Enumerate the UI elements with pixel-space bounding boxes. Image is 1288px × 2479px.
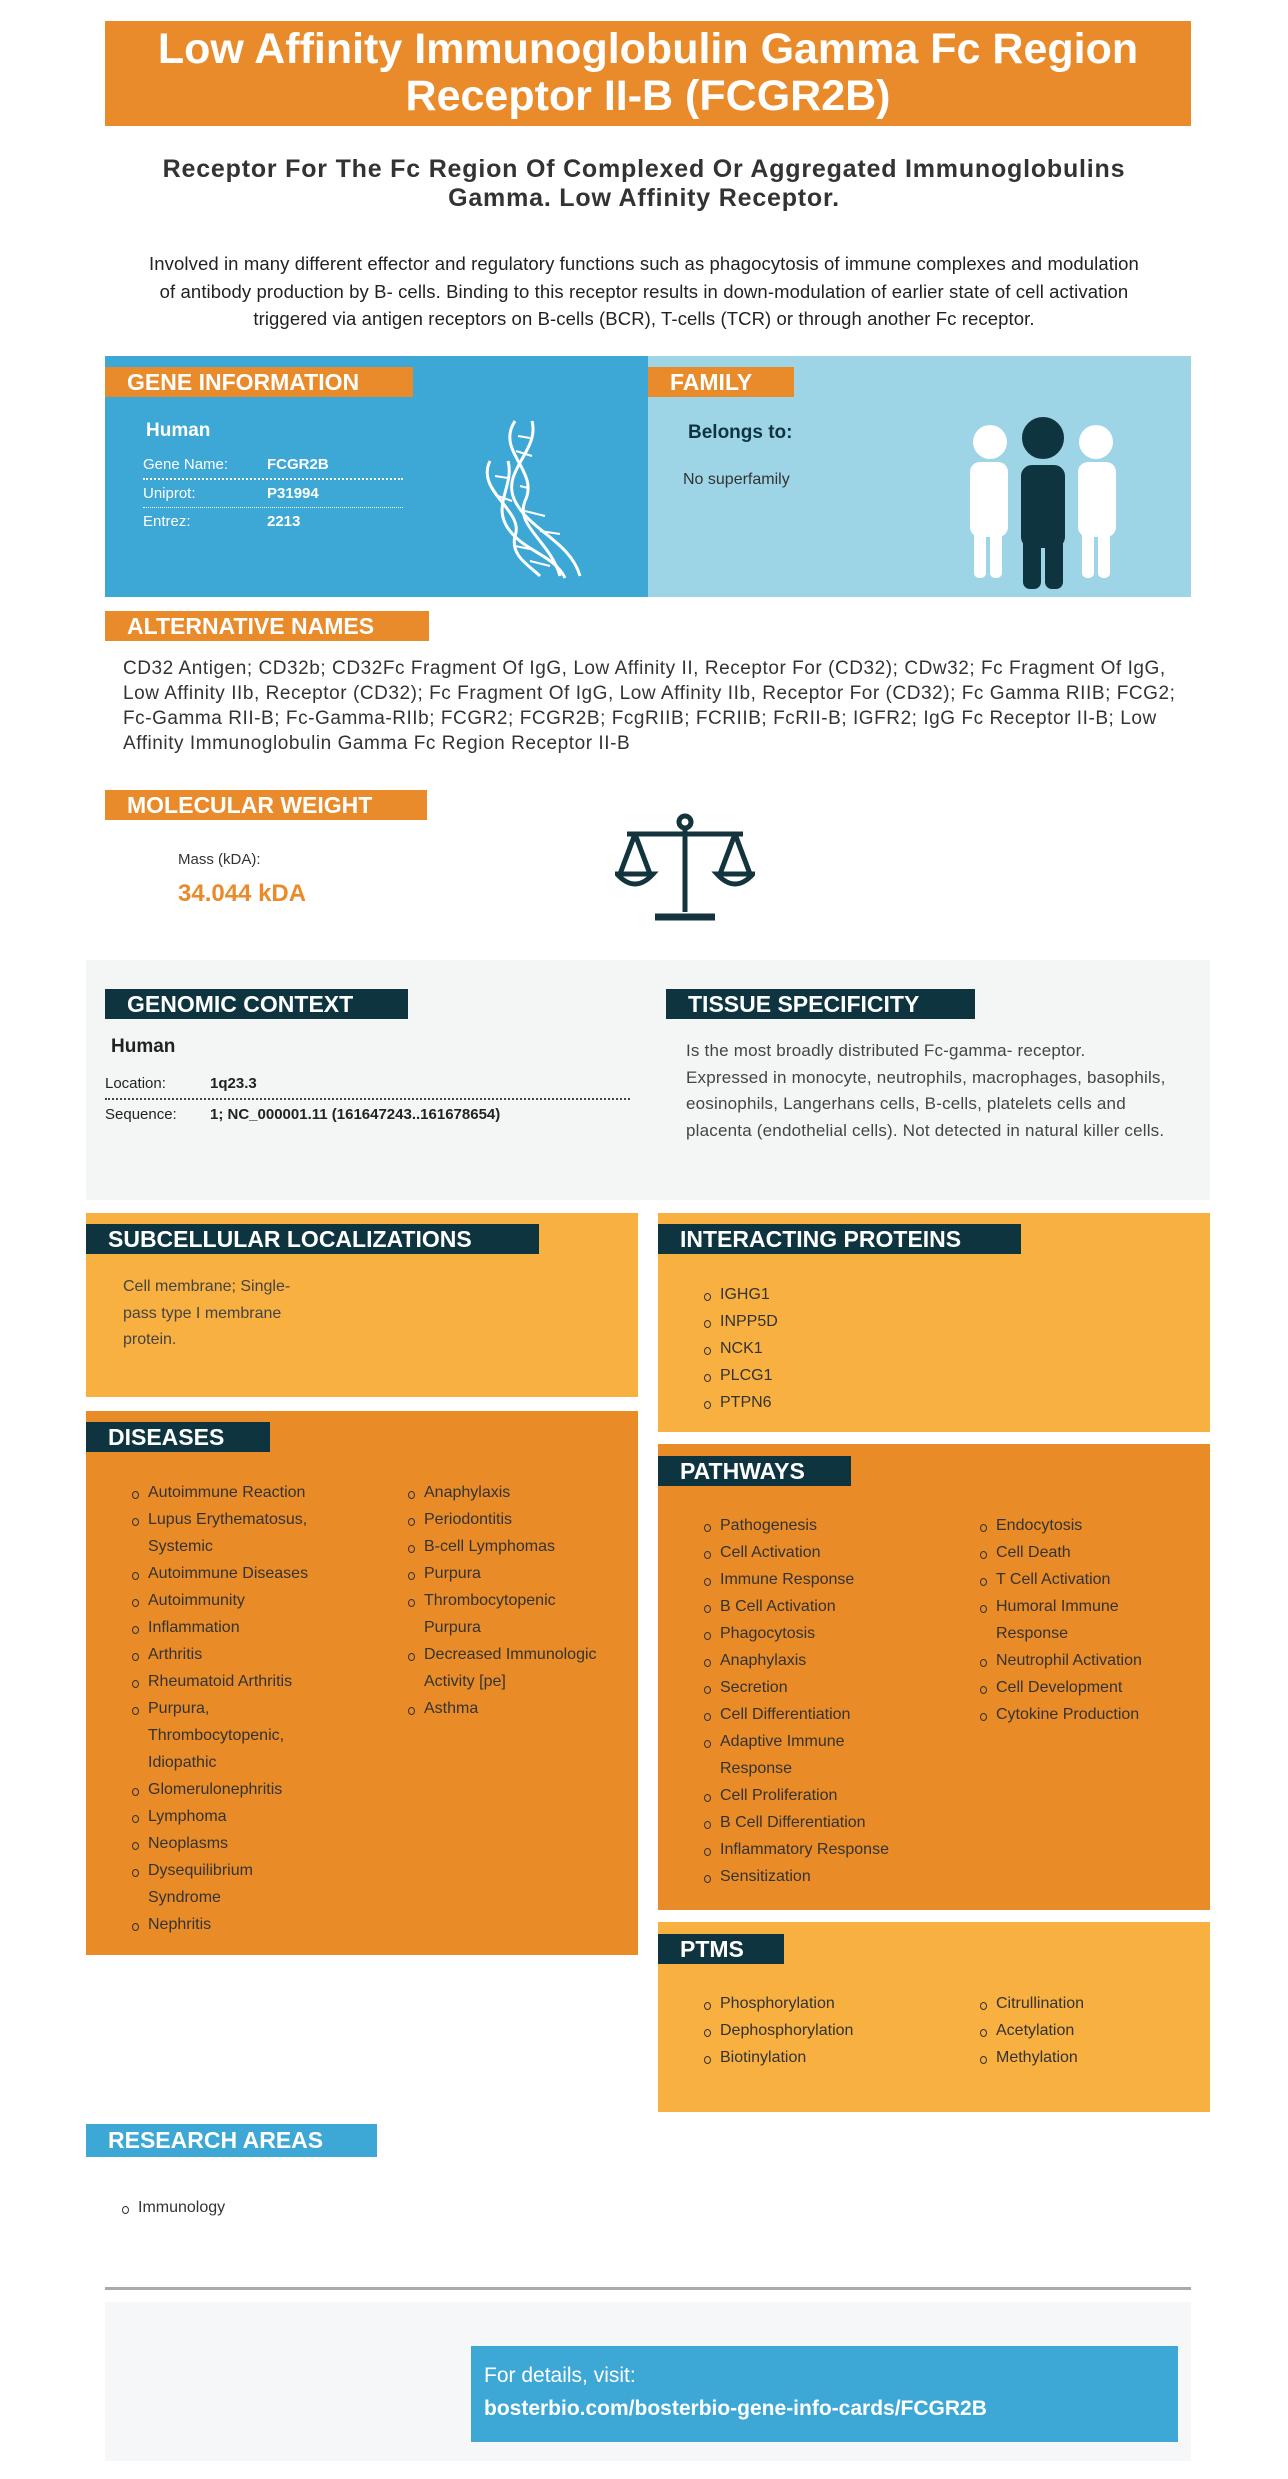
pathways col 1: Immune Response — [720, 1571, 854, 1588]
heading: alternative names: ALTERNATIVE NAMES — [127, 613, 374, 639]
heading: diseases — [86, 1422, 270, 1452]
disease list col 1: Autoimmune Diseases — [148, 1565, 308, 1582]
alternative names text — [123, 658, 1175, 754]
disease list col 1: Lymphoma — [148, 1808, 227, 1825]
subcellular text: protein. — [123, 1331, 176, 1348]
disease list col 1: Lupus Erythematosus, — [148, 1511, 307, 1528]
gene info text: Gene Name: — [143, 456, 228, 473]
belongs to: Belongs to: — [688, 422, 792, 443]
PTM col 2: Citrullination — [996, 1995, 1084, 2012]
disease list col 2: Activity [pe] — [424, 1673, 506, 1690]
genomic text: 1; NC_000001.11 (161647243..161678654) — [210, 1106, 500, 1123]
disease list col 2: Purpura — [424, 1565, 481, 1582]
disease list col 2: Decreased Immunologic — [424, 1646, 597, 1663]
pathways col 2: Endocytosis — [996, 1517, 1082, 1534]
callout: details link: bosterbio.com/bosterbio-gene-info-cards/FCGR2B — [484, 2397, 987, 2420]
alternative names text: CD32 Antigen; CD32b; CD32Fc Fragment Of IgG, Low Affinity II, Receptor For (CD32); CDw32; Fc Fragment Of IgG, — [123, 658, 1166, 679]
subtitle — [163, 155, 1125, 212]
pathways col 1: Inflammatory Response — [720, 1841, 889, 1858]
disease list col 1: Dysequilibrium — [148, 1862, 253, 1879]
callout: details link: For details, visit: — [484, 2364, 636, 2387]
pathways col 1: B Cell Activation — [720, 1598, 836, 1615]
family text: No superfamily — [683, 471, 790, 488]
mass value: 34.044 kDA — [178, 880, 306, 907]
pathways col 1: Secretion — [720, 1679, 788, 1696]
pathways col 1: Anaphylaxis — [720, 1652, 806, 1669]
genomic text: 1q23.3 — [210, 1075, 257, 1092]
heading: tissue specificity: TISSUE SPECIFICITY — [688, 991, 919, 1017]
disease list col 2: Asthma — [424, 1700, 478, 1717]
disease list col 1: Purpura, — [148, 1700, 209, 1717]
genomic text: Human — [111, 1036, 175, 1057]
heading: family: FAMILY — [670, 369, 752, 395]
heading: PTMs — [658, 1934, 784, 1964]
protein list: NCK1 — [720, 1340, 763, 1357]
pathways col 1: Pathogenesis — [720, 1517, 817, 1534]
pathways col 1: Adaptive Immune — [720, 1733, 845, 1750]
icon: DNA — [486, 420, 582, 579]
pathways col 2: Cell Development — [996, 1679, 1122, 1696]
PTM col 1: Biotinylation — [720, 2049, 806, 2066]
heading: gene information — [105, 367, 413, 397]
pathways col 1: Cell Differentiation — [720, 1706, 850, 1723]
tissue text — [686, 1041, 1166, 1140]
panel: gene information — [105, 356, 648, 597]
tissue text: placenta (endothelial cells). Not detected in natural killer cells. — [686, 1120, 1164, 1140]
disease list col 2 — [408, 1484, 597, 1717]
pathways col 2: Cytokine Production — [996, 1706, 1139, 1723]
gene info text: Uniprot: — [143, 485, 196, 502]
heading: genomic context: GENOMIC CONTEXT — [127, 991, 353, 1017]
disease list col 2: Anaphylaxis — [424, 1484, 510, 1501]
protein list — [704, 1286, 778, 1411]
gene info text: P31994 — [267, 485, 319, 502]
description: of antibody production by B- cells. Binding to this receptor results in down-modulation of earlier state of cell activation — [160, 280, 1128, 302]
heading: tissue specificity — [666, 989, 975, 1019]
PTM col 1: Dephosphorylation — [720, 2022, 853, 2039]
pathways col 1: Sensitization — [720, 1868, 811, 1885]
description: Involved in many different effector and regulatory functions such as phagocytosis of immune complexes and modulation — [149, 253, 1139, 274]
gene info text: Entrez: — [143, 513, 191, 530]
PTM col 1 — [704, 1995, 853, 2066]
gene info text: 2213 — [267, 513, 300, 530]
subtitle: Gamma. Low Affinity Receptor. — [448, 184, 840, 212]
protein list: INPP5D — [720, 1313, 778, 1330]
PTM col 1: Phosphorylation — [720, 1995, 835, 2012]
panel: genomic + tissue — [86, 960, 1210, 1200]
heading: interacting: INTERACTING PROTEINS — [680, 1226, 961, 1252]
footer panel — [105, 2302, 1191, 2461]
mass label: Mass (kDA): — [178, 851, 260, 868]
disease list col 1: Nephritis — [148, 1916, 211, 1933]
PTM col 2 — [980, 1995, 1084, 2066]
disease list col 1: Glomerulonephritis — [148, 1781, 282, 1798]
genomic text: Sequence: — [105, 1106, 177, 1123]
pathways col 1: B Cell Differentiation — [720, 1814, 866, 1831]
panel: subcellular localizations — [86, 1213, 638, 1397]
heading: family — [648, 367, 794, 397]
panel: family — [648, 356, 1191, 597]
disease list col 1: Thrombocytopenic, — [148, 1727, 284, 1744]
alternative names text: Affinity Immunoglobulin Gamma Fc Region Receptor II-B — [123, 733, 630, 754]
disease list col 2: Purpura — [424, 1619, 481, 1636]
disease list col 1: Arthritis — [148, 1646, 202, 1663]
research list: Immunology — [138, 2199, 225, 2216]
subcellular text — [123, 1278, 290, 1348]
disease list col 1: Autoimmune Reaction — [148, 1484, 305, 1501]
protein list: PTPN6 — [720, 1394, 772, 1411]
pathways col 2: Neutrophil Activation — [996, 1652, 1142, 1669]
pathways col 1: Cell Proliferation — [720, 1787, 837, 1804]
pathways col 2: Response — [996, 1625, 1068, 1642]
genomic text: Location: — [105, 1075, 166, 1092]
icon: scale — [615, 814, 755, 920]
PTM col 2: Methylation — [996, 2049, 1078, 2066]
alternative names text: Fc-Gamma RII-B; Fc-Gamma-RIIb; FCGR2; FCGR2B; FcgRIIB; FCRIIB; FcRII-B; IGFR2; IgG Fc Receptor II-B; Low — [123, 708, 1157, 729]
disease list col 2: B-cell Lymphomas — [424, 1538, 555, 1555]
heading: alternative names — [105, 611, 429, 641]
callout: details link — [471, 2346, 1178, 2442]
description: triggered via antigen receptors on B-cells (BCR), T-cells (TCR) or through another Fc receptor. — [253, 308, 1035, 329]
tissue text: Expressed in monocyte, neutrophils, macrophages, basophils, — [686, 1068, 1166, 1086]
heading: gene information: GENE INFORMATION — [127, 369, 359, 395]
heading: research areas — [86, 2124, 377, 2157]
gene info text: FCGR2B — [267, 456, 329, 473]
pathways col 1: Cell Activation — [720, 1544, 820, 1561]
panel: diseases — [86, 1411, 638, 1955]
heading: molecular weight: MOLECULAR WEIGHT — [127, 792, 372, 818]
pathways col 1 — [704, 1517, 889, 1885]
subtitle: Receptor For The Fc Region Of Complexed Or Aggregated Immunoglobulins — [163, 155, 1125, 183]
title — [105, 21, 1191, 126]
icon: people — [970, 417, 1116, 589]
panel: pathways — [658, 1444, 1210, 1910]
protein list: PLCG1 — [720, 1367, 772, 1384]
heading: pathways: PATHWAYS — [680, 1458, 805, 1484]
tissue text: eosinophils, Langerhans cells, B-cells, platelets cells and — [686, 1094, 1126, 1113]
genomic text — [105, 1036, 630, 1123]
tissue text: Is the most broadly distributed Fc-gamma- receptor. — [686, 1041, 1085, 1060]
disease list col 1: Autoimmunity — [148, 1592, 245, 1609]
heading: subcellular: SUBCELLULAR LOCALIZATIONS — [108, 1226, 472, 1252]
panel: PTMs — [658, 1922, 1210, 2112]
pathways col 2: Cell Death — [996, 1544, 1071, 1561]
heading: molecular weight — [105, 790, 427, 820]
disease list col 1: Inflammation — [148, 1619, 240, 1636]
disease list col 1: Rheumatoid Arthritis — [148, 1673, 292, 1690]
heading: diseases: DISEASES — [108, 1424, 224, 1450]
disease list col 1: Systemic — [148, 1538, 213, 1555]
pathways col 1: Response — [720, 1760, 792, 1777]
subcellular text: Cell membrane; Single- — [123, 1278, 290, 1295]
heading: research areas: RESEARCH AREAS — [108, 2127, 323, 2153]
pathways col 2 — [980, 1517, 1142, 1723]
disease list col 2: Periodontitis — [424, 1511, 512, 1528]
alternative names text: Low Affinity IIb, Receptor (CD32); Fc Fragment Of IgG, Low Affinity IIb, Receptor For (CD32); Fc Gamma RIIB; FCG2; — [123, 683, 1175, 704]
protein list: IGHG1 — [720, 1286, 770, 1303]
disease list col 1: Syndrome — [148, 1889, 221, 1906]
description — [149, 253, 1139, 329]
title: Receptor II-B (FCGR2B) — [406, 72, 890, 120]
heading: pathways — [658, 1456, 851, 1486]
heading: subcellular — [86, 1224, 539, 1254]
pathways col 2: Humoral Immune — [996, 1598, 1119, 1615]
pathways col 2: T Cell Activation — [996, 1571, 1110, 1588]
subcellular text: pass type I membrane — [123, 1304, 281, 1322]
pathways col 1: Phagocytosis — [720, 1625, 815, 1642]
heading: interacting — [658, 1224, 1021, 1254]
heading: PTMs: PTMS — [680, 1936, 744, 1962]
heading: genomic context — [105, 989, 408, 1019]
disease list col 1 — [132, 1484, 308, 1933]
panel: interacting proteins — [658, 1213, 1210, 1432]
gene info text — [143, 420, 403, 530]
disease list col 2: Thrombocytopenic — [424, 1592, 556, 1609]
disease list col 1: Idiopathic — [148, 1754, 216, 1771]
PTM col 2: Acetylation — [996, 2022, 1074, 2039]
disease list col 1: Neoplasms — [148, 1835, 228, 1852]
title: Low Affinity Immunoglobulin Gamma Fc Region — [158, 25, 1138, 73]
gene info text: Human — [146, 420, 210, 441]
